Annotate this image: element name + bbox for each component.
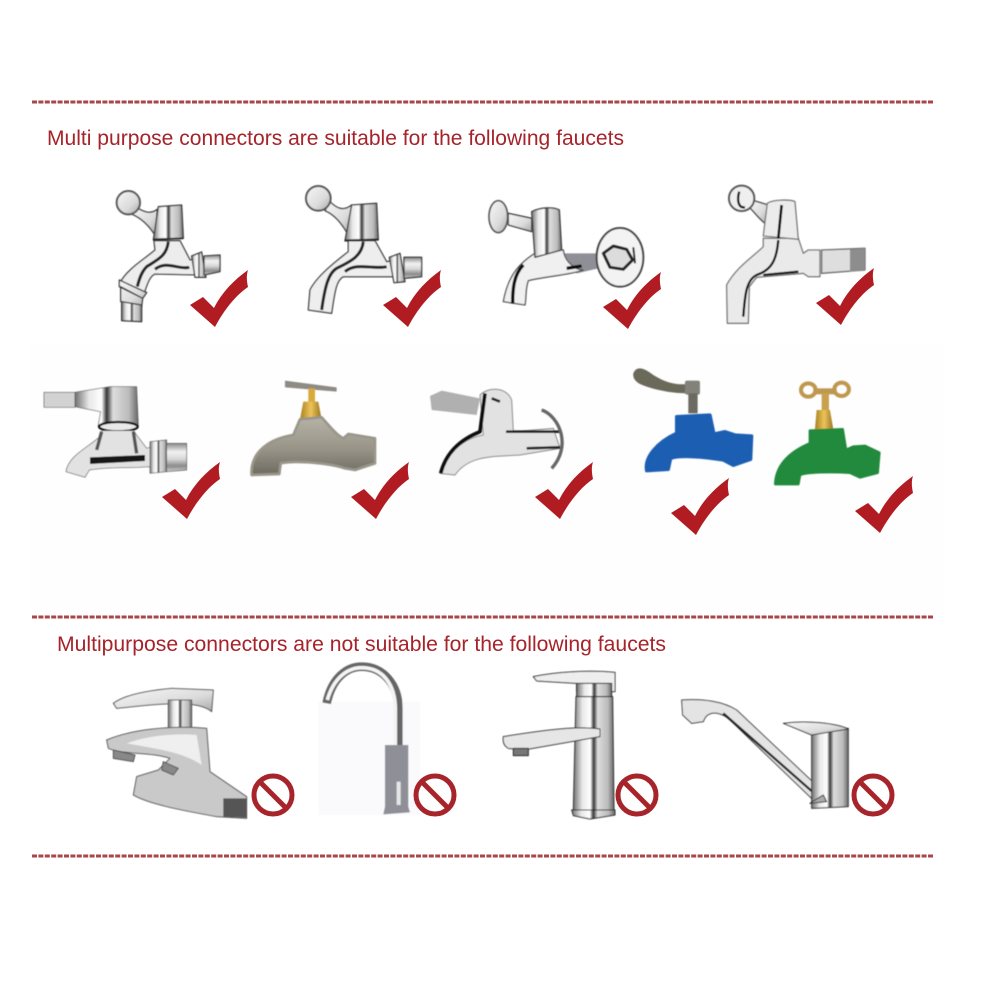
check mark 8 [671, 478, 729, 535]
prohibition sign C [618, 776, 656, 814]
faucet 3: wall-mounted chrome tap [489, 201, 643, 305]
check mark 7 [535, 462, 593, 519]
heading: unsuitable faucets: Multipurpose connectors are not suitable for the following faucets [57, 633, 666, 656]
faucet B: gooseneck sensor tap [318, 667, 420, 815]
check mark 5 [162, 462, 220, 519]
faucet 1: chrome hose tap [117, 191, 220, 322]
check mark 6 [351, 462, 409, 519]
faucet 4: chrome threaded long tap [727, 186, 865, 323]
faucet 7: chrome sketch tap with flange [430, 389, 562, 475]
check mark 9 [855, 476, 913, 533]
faucet 6: cast iron tap with brass stem [252, 381, 375, 475]
check mark 2 [383, 270, 441, 327]
divider: middle [32, 616, 934, 618]
faucet 8: blue tap [633, 368, 752, 471]
faucet 9: green tap with brass key [775, 383, 879, 484]
faint background patch [30, 345, 945, 610]
check mark 4 [816, 268, 874, 325]
divider: top [32, 100, 934, 104]
heading: suitable faucets: Multi purpose connectors are suitable for the following faucets [47, 127, 624, 150]
check mark 1 [190, 270, 248, 327]
faucet D: long-spout kitchen mixer [682, 700, 848, 808]
prohibition sign D [854, 776, 892, 814]
faucet 5: chrome lever tap [44, 387, 187, 477]
divider: bottom [32, 854, 934, 858]
faucet A: dual-handle basin mixer [107, 688, 247, 818]
check mark 3 [603, 272, 661, 329]
faucet 2: chrome plain spout tap [306, 186, 422, 313]
faucet C: tall single-lever basin tap [503, 671, 615, 819]
prohibition sign B [416, 776, 454, 814]
prohibition sign A [254, 776, 292, 814]
